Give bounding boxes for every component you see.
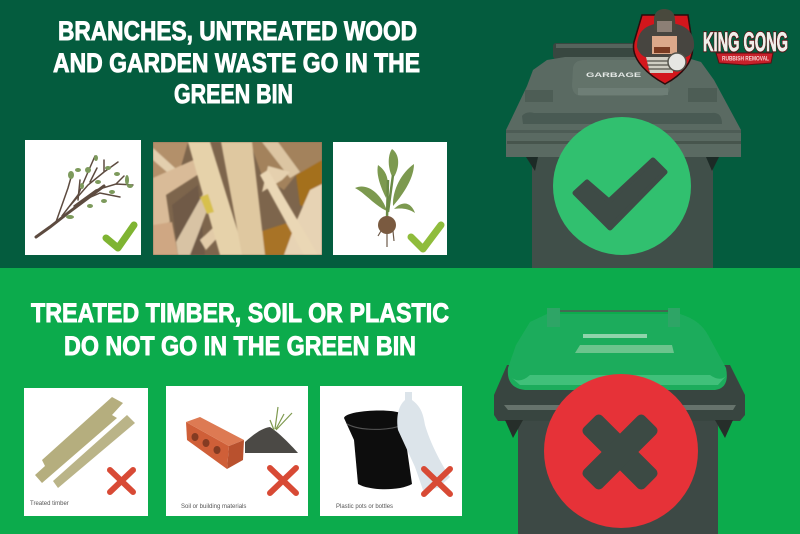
bin: dark green lid, allowed: GARBAGE <box>586 73 641 79</box>
icon: red cross <box>110 470 133 492</box>
icon: gorilla shield <box>633 9 694 84</box>
card: plastic pots or bottles <box>320 386 462 516</box>
icon: plastic bottle <box>397 392 450 490</box>
panel: top background <box>0 0 800 268</box>
bin: bright green lid, not allowed <box>494 308 745 534</box>
card: branches <box>25 140 141 255</box>
heading: what does not go in the green bin: TREATED TIMBER, SOIL OR PLASTIC <box>31 298 449 328</box>
icon: brick <box>186 417 244 469</box>
icon: green tick <box>106 225 134 248</box>
icon: plant bulb <box>378 216 396 234</box>
heading: what does not go in the green bin: DO NOT GO IN THE GREEN BIN <box>64 331 416 361</box>
icon: soil pile with grass <box>245 407 298 453</box>
icon: large red cross circle <box>544 374 698 528</box>
text: caption: Treated timber <box>30 501 69 507</box>
heading: what does not go in the green bin <box>31 298 449 361</box>
photo: untreated wood pile <box>153 142 322 255</box>
heading: what goes in the green bin: BRANCHES, UNTREATED WOOD <box>58 16 417 46</box>
bin: dark green lid, allowed <box>506 43 741 268</box>
logo: King Gong Rubbish Removal <box>633 9 788 84</box>
card: soil or building materials <box>166 386 308 516</box>
icon: black plant pot <box>344 411 412 489</box>
heading: what goes in the green bin: GREEN BIN <box>174 79 293 109</box>
text: caption: Soil or building materials <box>181 504 246 510</box>
heading: what goes in the green bin: AND GARDEN WASTE GO IN THE <box>53 48 420 78</box>
heading: what goes in the green bin <box>53 16 420 109</box>
icon: red cross <box>424 469 450 494</box>
text: logo wordmark: RUBBISH REMOVAL <box>722 56 769 62</box>
card: garden plant <box>333 142 447 255</box>
card: treated timber <box>24 388 148 516</box>
text: caption: Plastic pots or bottles <box>336 504 393 510</box>
icon: large green tick circle <box>553 117 691 255</box>
icon: green tick <box>411 225 441 249</box>
icon: red cross <box>270 468 296 493</box>
panel: bottom background <box>0 268 800 534</box>
